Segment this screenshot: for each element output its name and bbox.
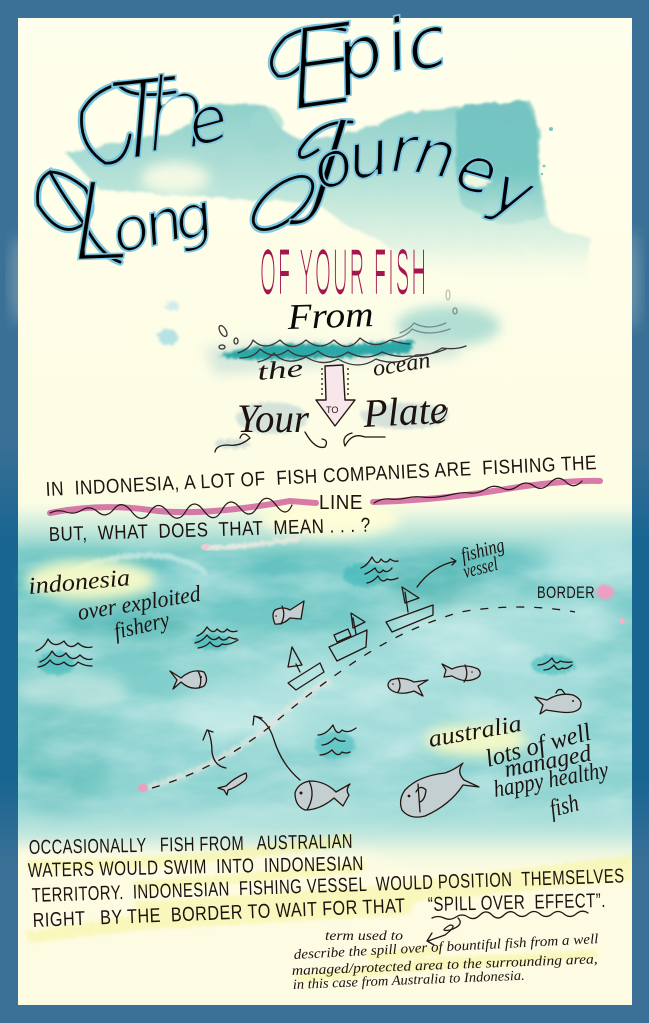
label: lots of well: lots of well bbox=[483, 719, 594, 773]
title word: Journey: ourney bbox=[306, 114, 544, 234]
label: fishing vessel: vessel bbox=[461, 553, 500, 583]
label: australia: australia bbox=[427, 711, 524, 753]
lettering shadow bbox=[214, 402, 449, 449]
arrow one bbox=[203, 730, 226, 768]
title word: Journey: J bbox=[284, 88, 356, 238]
title word: Journey: J bbox=[284, 88, 356, 238]
title word: Epic bbox=[277, 0, 454, 140]
explanation paragraph bbox=[28, 831, 625, 945]
map: australia labels bbox=[424, 711, 611, 823]
arrows from fish across border bbox=[203, 716, 300, 780]
border dashed line bbox=[138, 583, 625, 792]
paragraph line 1: OCCASIONALLY FISH FROM AUSTRALIAN bbox=[29, 831, 353, 859]
title word: Journey: ourney bbox=[306, 114, 544, 234]
label: happy healthy: happy healthy bbox=[492, 757, 611, 803]
down arrow labelled TO bbox=[316, 365, 355, 426]
label: over exploited: over exploited bbox=[76, 581, 203, 625]
watercolour splash behind the title bbox=[66, 101, 590, 285]
label: BORDER: BORDER bbox=[537, 583, 595, 602]
fish bbox=[170, 601, 581, 817]
fish: small border bbox=[218, 773, 247, 795]
line two: BUT, WHAT DOES THAT MEAN . . . ? bbox=[48, 514, 371, 546]
title word: The: e bbox=[179, 81, 236, 162]
word: ocean: ocean bbox=[371, 347, 432, 381]
note line 4: in this case from Australia to Indonesia. bbox=[293, 969, 525, 993]
title word: Epic: pic bbox=[327, 0, 454, 99]
label: fishing vessel bbox=[459, 534, 507, 583]
label: indonesia: indonesia bbox=[27, 565, 131, 600]
title word: Long: ong bbox=[104, 179, 221, 268]
title word: Epic: E bbox=[277, 0, 369, 140]
word: the: the bbox=[256, 355, 304, 386]
title swashes bbox=[38, 27, 352, 262]
map: indonesia side labels bbox=[25, 560, 203, 644]
title word: Long: L bbox=[68, 157, 135, 289]
title word: The: h bbox=[136, 50, 215, 179]
arrow two bbox=[253, 716, 300, 780]
vessel three bbox=[288, 647, 324, 690]
fishing vessels bbox=[288, 587, 433, 690]
title word: Long: L bbox=[68, 157, 135, 289]
lettering swashes bbox=[215, 408, 447, 452]
fish: australia two bbox=[442, 664, 480, 682]
vessel two bbox=[329, 613, 367, 661]
word: Plate: Plate bbox=[361, 387, 448, 436]
yellow highlighter strokes bbox=[25, 832, 632, 983]
definition note bbox=[292, 929, 599, 993]
title word: Long bbox=[68, 157, 221, 289]
fish: australia one bbox=[388, 678, 428, 696]
title word: The bbox=[101, 50, 236, 189]
fish: sad left bbox=[273, 601, 304, 624]
note line 2: describe the spill over of bountiful fish from a well bbox=[293, 932, 599, 963]
sea watercolour background bbox=[18, 501, 632, 860]
title word: The: e bbox=[179, 81, 236, 162]
word: Your: Your bbox=[237, 396, 309, 441]
down arrow labelled TO: TO bbox=[326, 405, 338, 415]
fish: big happy bbox=[401, 763, 479, 817]
label: fishery: fishery bbox=[112, 607, 172, 644]
wave marks bbox=[36, 557, 572, 755]
pink squiggle line bbox=[50, 478, 600, 518]
fish: swimming across bbox=[295, 781, 350, 810]
note line 1: term used to bbox=[325, 929, 403, 944]
title word: The: T bbox=[101, 52, 190, 189]
title word: Epic: pic bbox=[327, 0, 454, 99]
word: From: From bbox=[286, 294, 374, 337]
note line 3: managed/protected area to the surrounding area, bbox=[292, 952, 598, 979]
teal wave patches bbox=[38, 563, 575, 759]
title bbox=[38, 0, 544, 289]
fish: sad middle bbox=[170, 671, 206, 689]
paragraph line 4: RIGHT BY THE BORDER TO WAIT FOR THAT bbox=[32, 895, 406, 932]
ocean wave illustration bbox=[158, 290, 500, 375]
title word: The: h bbox=[136, 50, 215, 179]
word LINE: LINE bbox=[319, 492, 363, 514]
squiggle underline and arrow to definition bbox=[427, 911, 588, 945]
label: managed: managed bbox=[502, 740, 595, 783]
label: fishing vessel: fishing bbox=[459, 534, 507, 567]
arrow to fishing vessel label bbox=[417, 558, 456, 587]
title word: Long: ong bbox=[104, 179, 221, 268]
paragraph line 2: WATERS WOULD SWIM INTO INDONESIAN bbox=[28, 853, 364, 882]
title word: The: T bbox=[101, 52, 190, 189]
vessel one bbox=[386, 587, 433, 632]
title word: Epic: E bbox=[277, 0, 369, 140]
fish: australia three bbox=[535, 689, 581, 714]
label: fish: fish bbox=[547, 790, 582, 823]
fishing-the-line heading bbox=[45, 452, 600, 546]
